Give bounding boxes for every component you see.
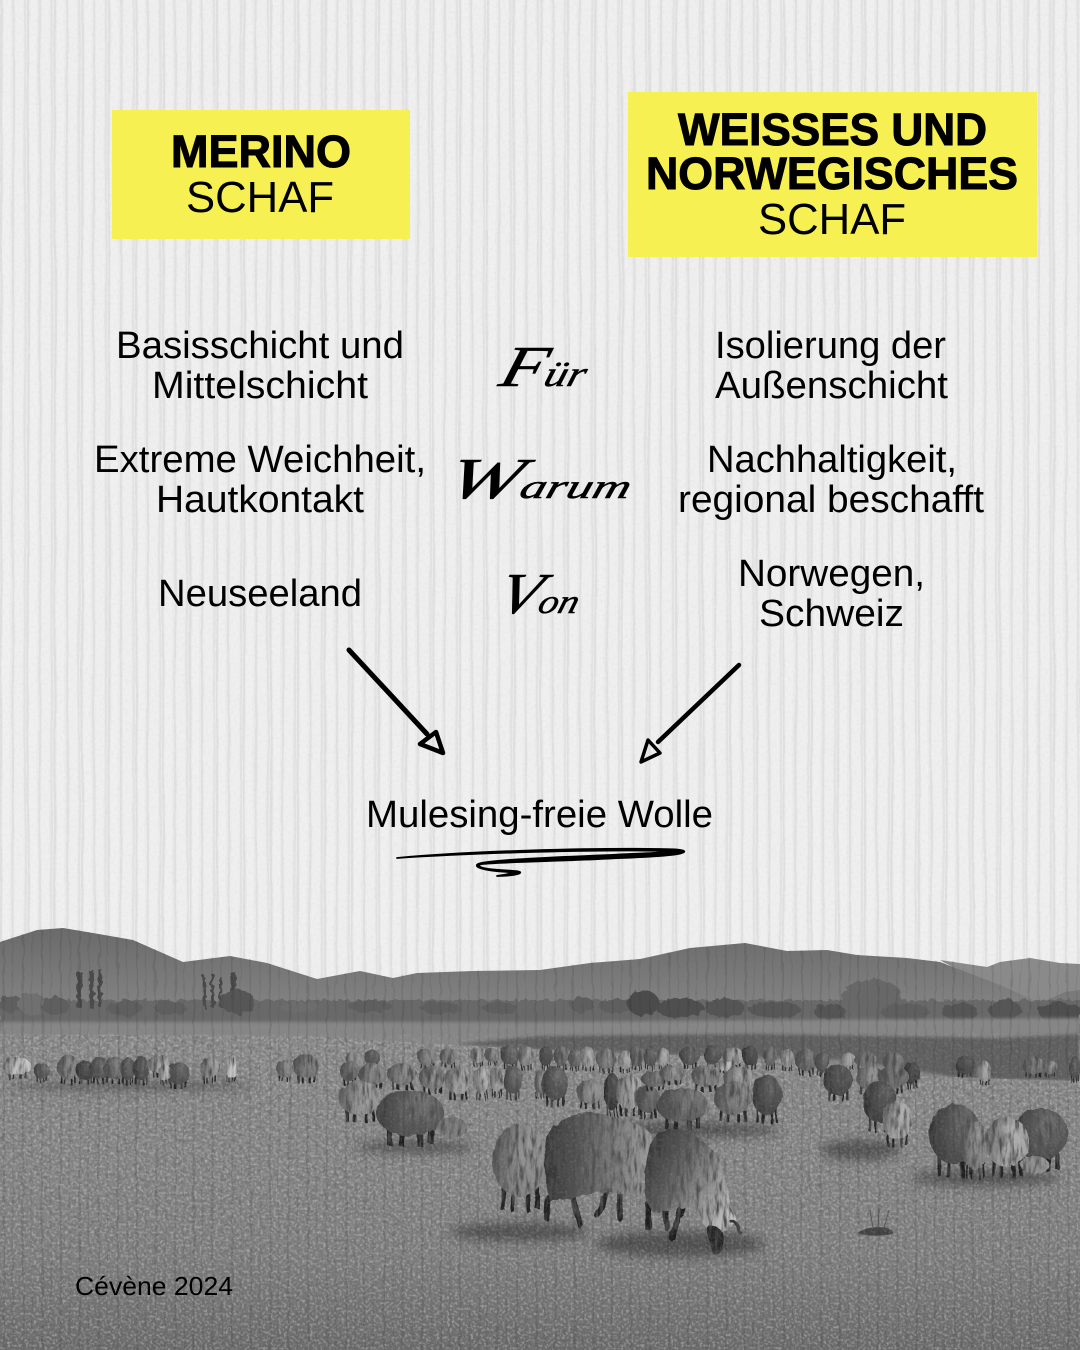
right text: Norwegen, Schweiz: Norwegen, — [738, 553, 925, 595]
tuft of grass — [858, 1208, 893, 1235]
mountains — [0, 928, 1080, 1040]
script word: Für: Für — [492, 334, 599, 399]
arrow: left, pointing to Mulesing-freie Wolle — [349, 650, 443, 753]
right text: Norwegen, Schweiz — [738, 553, 925, 635]
label: Weisses und Norwegisches Schaf — [628, 92, 1037, 257]
field shadows — [5, 1082, 1060, 1257]
left text: Neuseeland: Neuseeland — [158, 573, 362, 615]
left text: Extreme Weichheit, Hautkontakt: Extreme Weichheit, — [94, 439, 426, 481]
back row — [345, 1045, 920, 1089]
label: Merino Schaf — [112, 110, 410, 239]
reed band — [0, 1018, 1080, 1080]
left text: Basisschicht und Mittelschicht: Mittelschicht — [152, 365, 368, 407]
label: Merino Schaf: MERINO — [171, 126, 351, 177]
label: Weisses und Norwegisches Schaf: SCHAF — [758, 195, 906, 244]
field grain — [0, 1030, 1080, 1350]
left text: Basisschicht und Mittelschicht: Basisschicht und — [116, 325, 404, 367]
left text: Basisschicht und Mittelschicht — [116, 325, 404, 407]
right text: Norwegen, Schweiz: Schweiz — [759, 593, 904, 635]
sheep herd — [0, 928, 1080, 1350]
mid row — [340, 1056, 1080, 1148]
tree line — [0, 969, 1080, 1032]
big sheep, front with horn — [645, 1129, 737, 1255]
right text: Isolierung der Außenschicht: Isolierung der — [715, 325, 946, 367]
right text: Isolierung der Außenschicht: Außenschicht — [715, 365, 948, 407]
result text: Mulesing-freie Wolle — [366, 794, 713, 836]
arrow: right, pointing to Mulesing-freie Wolle — [641, 665, 739, 762]
left text: Extreme Weichheit, Hautkontakt: Hautkontakt — [156, 479, 364, 521]
left text: Extreme Weichheit, Hautkontakt — [94, 439, 426, 521]
script word: Von: Von — [491, 561, 591, 626]
horn — [730, 1222, 742, 1234]
right text: Nachhaltigkeit, regional beschafft: regional beschafft — [678, 479, 984, 521]
script word: Warum: W arum — [440, 446, 643, 511]
scribble underline — [397, 849, 684, 876]
big sheep, centre — [545, 1112, 653, 1225]
far left herd — [3, 1054, 319, 1089]
grain and stripes on photo — [0, 928, 1080, 1350]
foreground sheep — [339, 1081, 1068, 1255]
label: Merino Schaf: SCHAF — [186, 173, 334, 222]
right text: Nachhaltigkeit, regional beschafft: Nachhaltigkeit, — [707, 439, 957, 481]
right text: Isolierung der Außenschicht — [715, 325, 948, 407]
label: Weisses und Norwegisches Schaf: WEISSES UND — [678, 104, 987, 155]
credit: Cévène 2024 — [75, 1271, 233, 1301]
right text: Nachhaltigkeit, regional beschafft — [678, 439, 984, 521]
field — [0, 1034, 1080, 1350]
label: Weisses und Norwegisches Schaf: NORWEGISCHES — [646, 148, 1018, 199]
